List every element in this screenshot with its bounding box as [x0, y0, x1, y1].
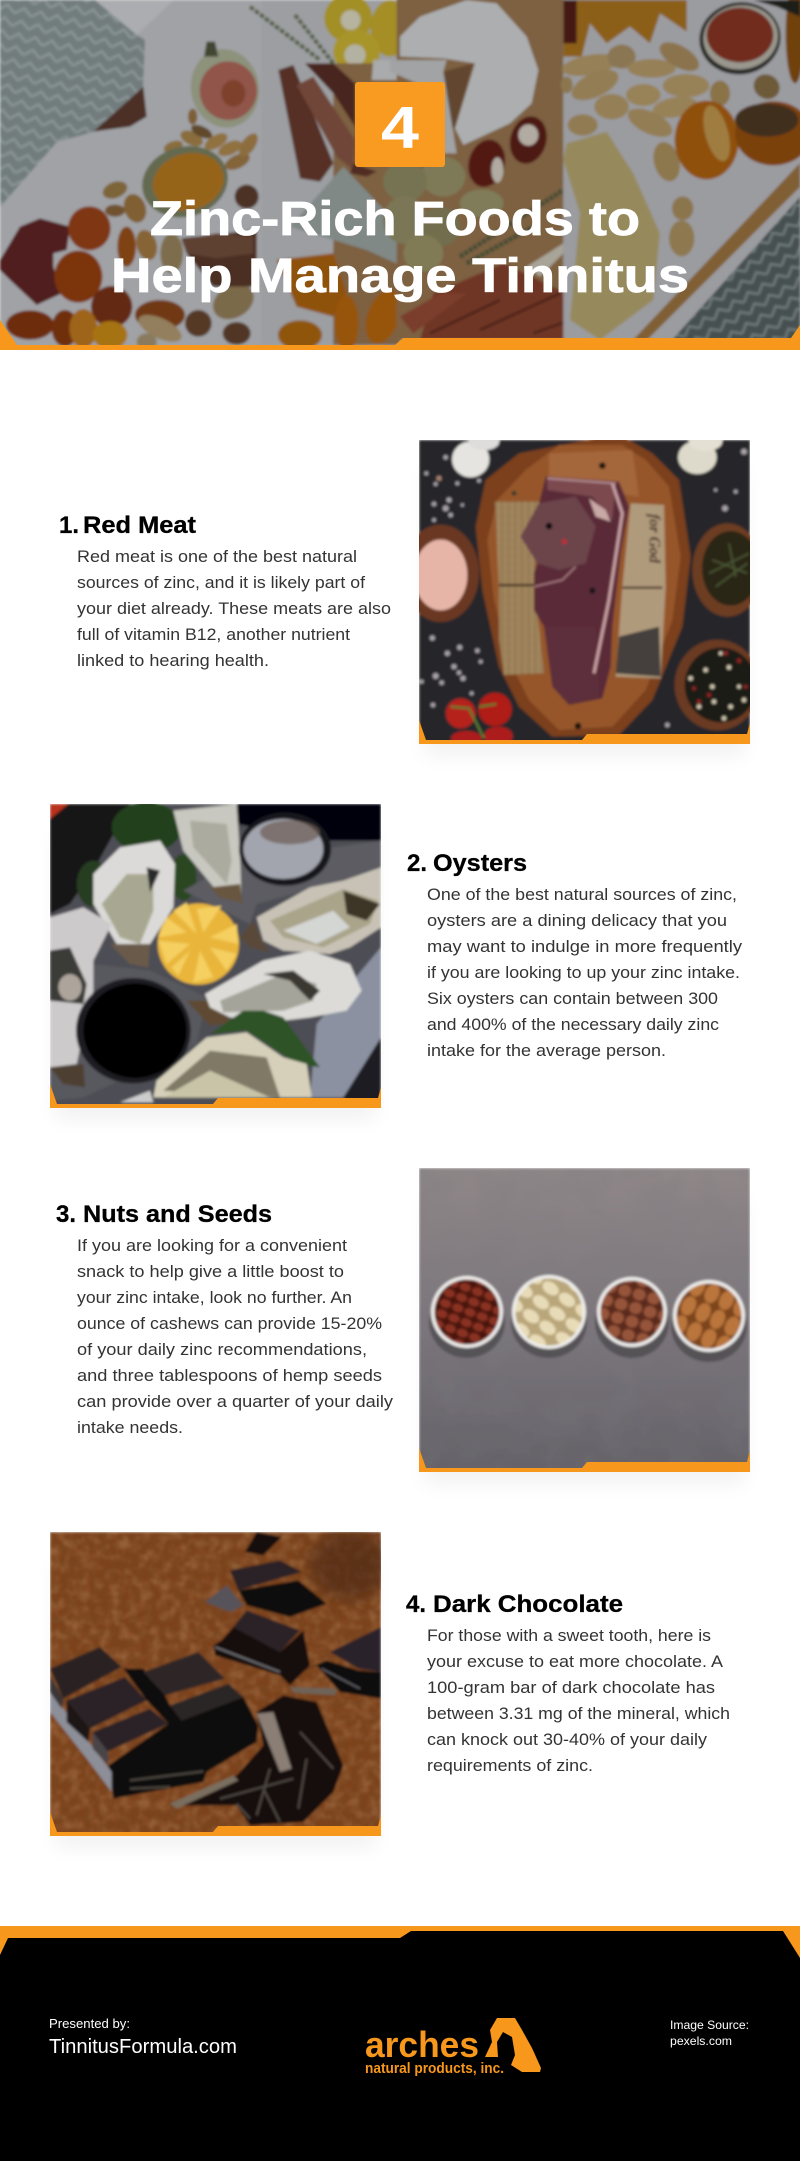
photo card: nuts	[419, 1168, 750, 1484]
heading: nuts and seeds: 3.	[56, 1201, 76, 1228]
heading: red meat: 1.	[59, 512, 79, 539]
logo: arches natural products	[365, 2018, 541, 2077]
text: oysters: and 400% of the necessary daily zinc	[427, 1015, 720, 1034]
text: red meat: sources of zinc, and it is likely part of	[77, 573, 365, 592]
title: Help Manage Tinnitus	[111, 250, 689, 303]
logo: arches natural products: arches	[365, 2024, 479, 2065]
text: oysters	[427, 885, 743, 1060]
title	[111, 193, 689, 303]
photo card: red meat	[419, 440, 750, 752]
text: red meat: Red meat is one of the best natural	[77, 547, 357, 566]
heading: oysters: Oysters	[433, 850, 527, 877]
text: dark chocolate	[427, 1626, 730, 1775]
text: oysters: Six oysters can contain between 300	[427, 989, 718, 1008]
text: dark chocolate: between 3.31 mg of the mineral, which	[427, 1704, 730, 1723]
photo card: chocolate	[50, 1530, 390, 1848]
text: oysters: intake for the average person.	[427, 1041, 666, 1060]
image source	[670, 2018, 749, 2048]
text: dark chocolate: For those with a sweet tooth, here is	[427, 1626, 711, 1645]
header orange ribbon	[0, 320, 800, 350]
photo card: red meat: for God	[646, 514, 663, 563]
number badge	[355, 82, 445, 167]
text: nuts and seeds: your zinc intake, look no further. An	[77, 1288, 352, 1307]
text: nuts and seeds: ounce of cashews can provide 15-20%	[77, 1314, 382, 1333]
text: dark chocolate: can knock out 30-40% of your daily	[427, 1730, 708, 1749]
heading: red meat: Red Meat	[83, 512, 196, 539]
text: oysters: may want to indulge in more frequently	[427, 937, 743, 956]
heading: oysters: 2.	[407, 850, 427, 877]
text: dark chocolate: 100-gram bar of dark chocolate has	[427, 1678, 715, 1697]
text: nuts and seeds: snack to help give a little boost to	[77, 1262, 344, 1281]
panel: dark chocolate	[50, 1530, 730, 1848]
logo: arches natural products: natural products, inc.	[365, 2060, 504, 2077]
text: nuts and seeds: intake needs.	[77, 1418, 183, 1437]
panel: nuts and seeds	[56, 1168, 750, 1484]
icon: delicate arch	[485, 2018, 541, 2072]
text: oysters: if you are looking to up your zinc intake.	[427, 963, 740, 982]
number badge: 4	[381, 95, 419, 161]
text: nuts and seeds	[77, 1236, 394, 1437]
text: nuts and seeds: of your daily zinc recommendations,	[77, 1340, 367, 1359]
text: red meat	[77, 547, 391, 670]
title: Zinc-Rich Foods to	[150, 193, 640, 246]
text: red meat: linked to hearing health.	[77, 651, 269, 670]
footer	[0, 1926, 800, 2161]
panel: red meat	[59, 432, 762, 756]
presented by: Presented by:	[49, 2016, 130, 2031]
image source: Image Source:	[670, 2018, 749, 2032]
presented by	[49, 2016, 237, 2058]
text: dark chocolate: requirements of zinc.	[427, 1756, 593, 1775]
text: oysters: oysters are a dining delicacy that you	[427, 911, 727, 930]
header photo: food board collage	[0, 0, 800, 351]
text: dark chocolate: your excuse to eat more chocolate. A	[427, 1652, 724, 1671]
photo card: oysters	[50, 802, 381, 1120]
footer black panel	[0, 1931, 800, 2161]
text: red meat: full of vitamin B12, another nutrient	[77, 625, 350, 644]
image source: pexels.com	[670, 2034, 732, 2048]
heading: dark chocolate: 4.	[406, 1591, 426, 1618]
text: oysters: One of the best natural sources of zinc,	[427, 885, 737, 904]
header banner	[0, 0, 800, 351]
presented by: TinnitusFormula.com	[49, 2036, 237, 2058]
text: nuts and seeds: can provide over a quarter of your daily	[77, 1392, 394, 1411]
heading: dark chocolate: Dark Chocolate	[433, 1591, 623, 1618]
text: nuts and seeds: and three tablespoons of hemp seeds	[77, 1366, 382, 1385]
text: nuts and seeds: If you are looking for a convenient	[77, 1236, 347, 1255]
text: red meat: your diet already. These meats are also	[77, 599, 391, 618]
panel: oysters	[50, 802, 743, 1120]
heading: nuts and seeds: Nuts and Seeds	[83, 1201, 272, 1228]
footer background	[0, 1926, 800, 2161]
